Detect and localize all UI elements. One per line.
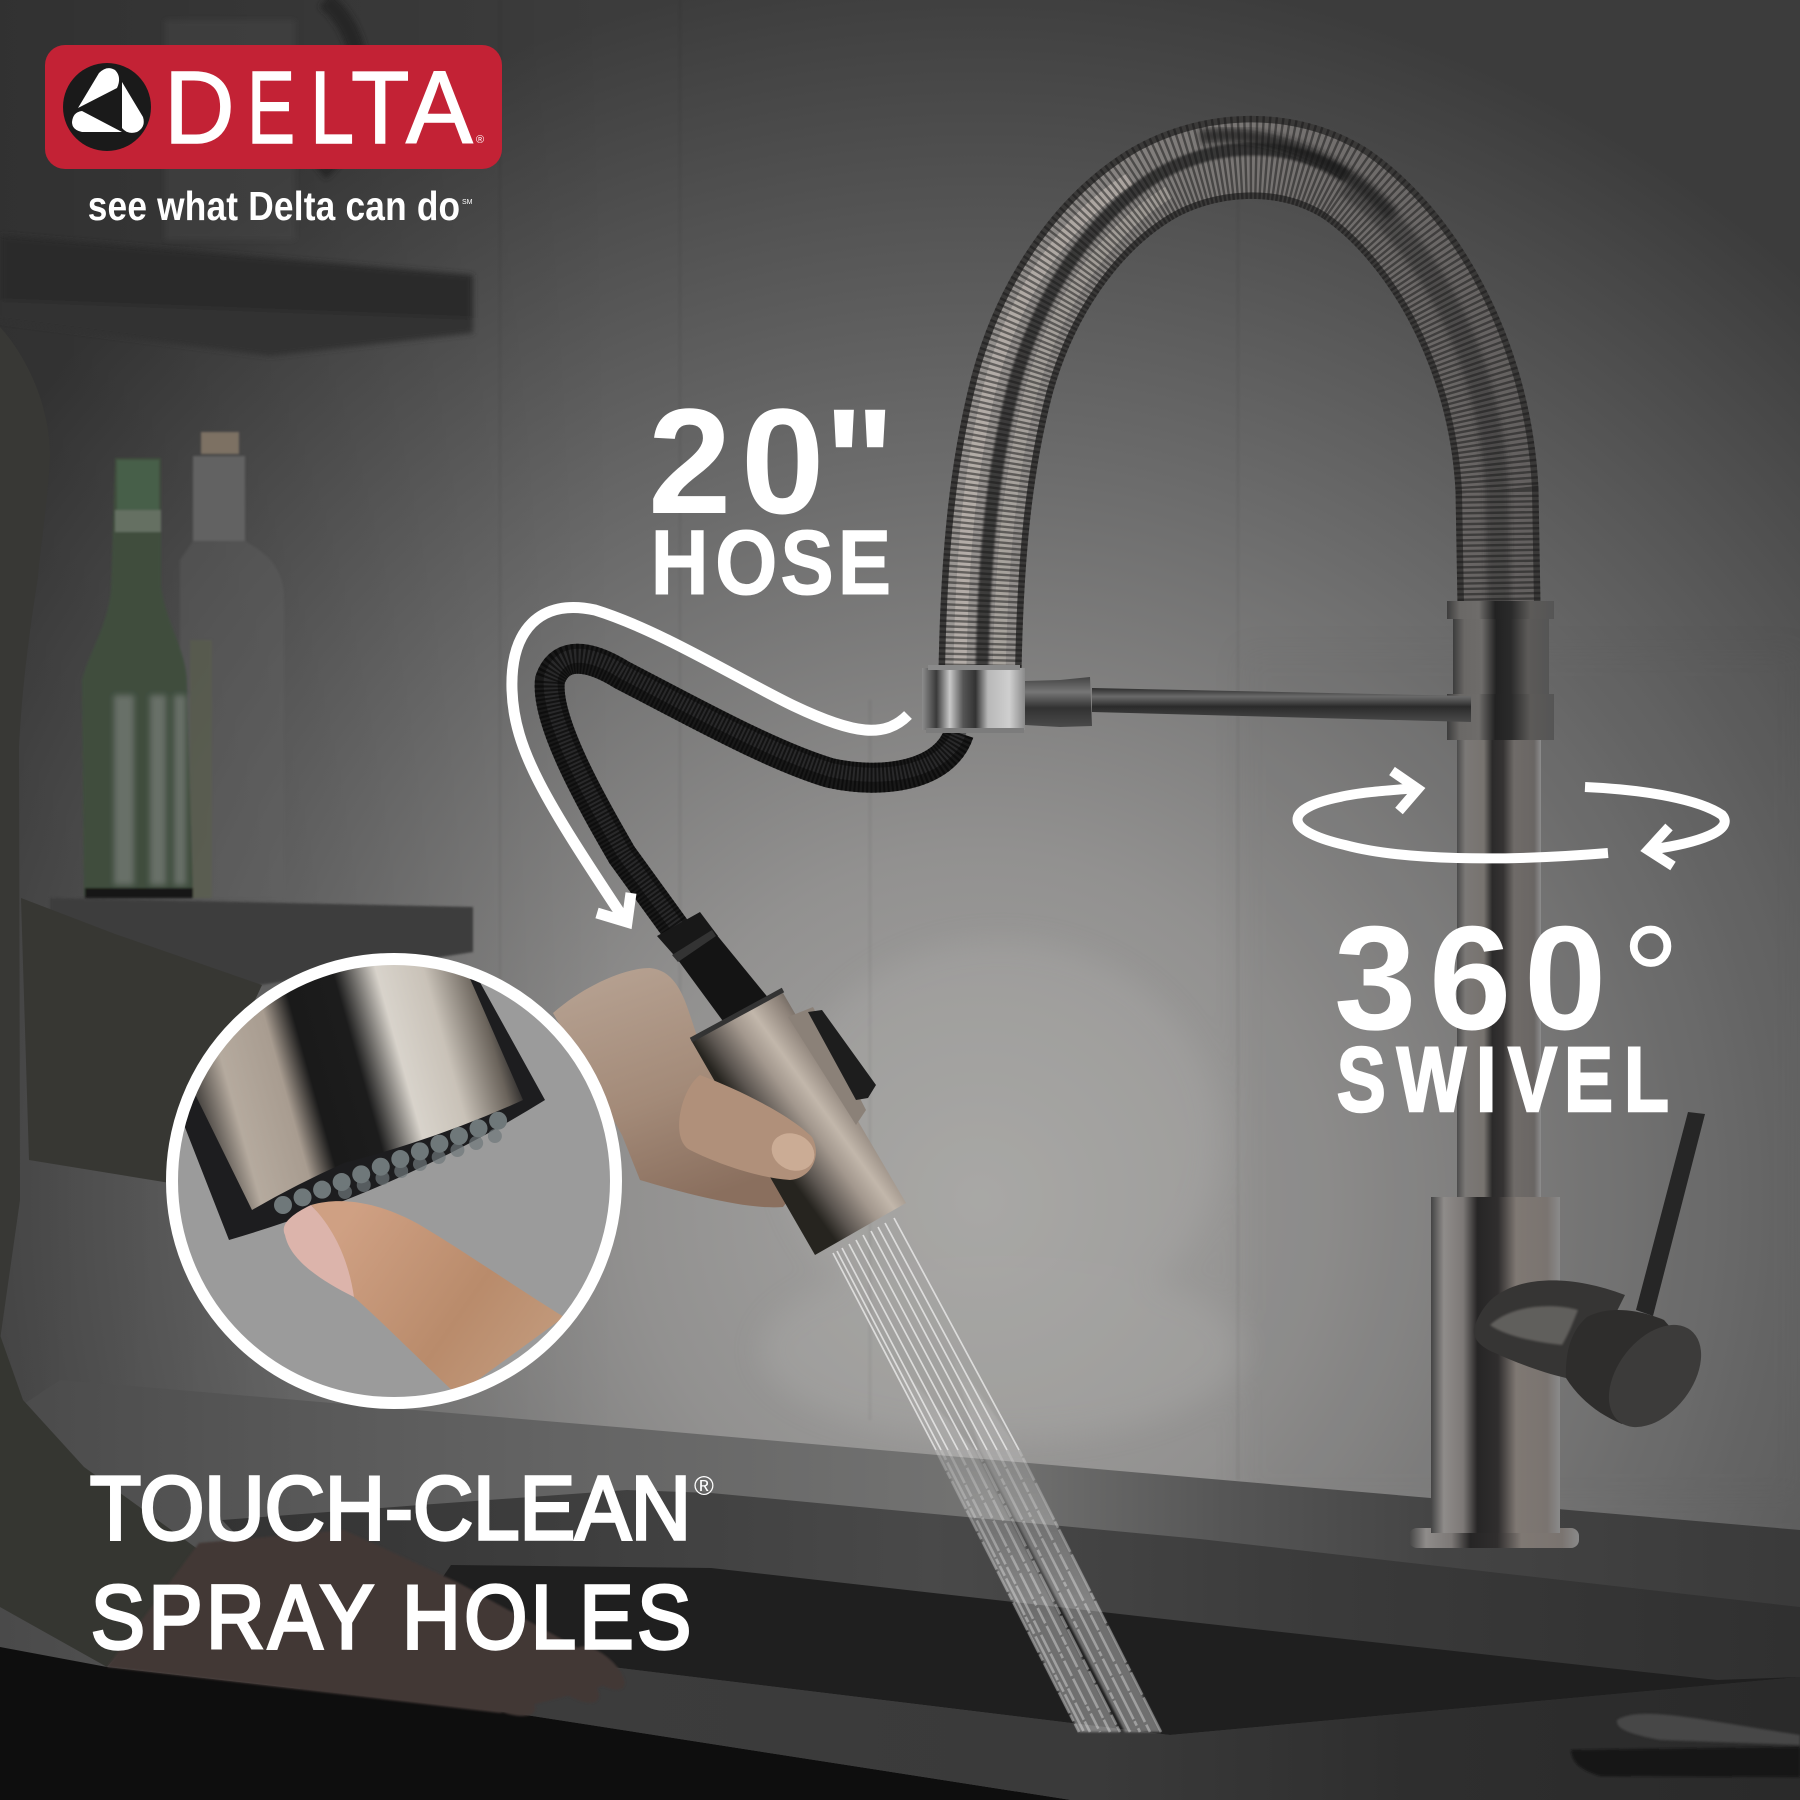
- lens background: [172, 959, 616, 1403]
- arrowhead: [597, 893, 631, 922]
- valve highlight: [1490, 1306, 1578, 1345]
- left swivel arrow: [1298, 788, 1608, 858]
- counter back surface: [0, 1380, 1800, 1800]
- rubber spray nozzles: [283, 1118, 505, 1205]
- spray head closeup metal: [196, 965, 523, 1210]
- items on counter right: [1571, 1714, 1800, 1777]
- right swivel arrow: [1585, 787, 1725, 850]
- brand name: E: [247, 50, 295, 165]
- bottle base: [85, 888, 193, 898]
- registered mark: ®: [694, 1471, 714, 1501]
- bottle neck band: [115, 510, 161, 532]
- registered mark: ®: [476, 134, 484, 146]
- sleeve of resting arm: [0, 1335, 199, 1667]
- spray holes label: SPRAY HOLES: [91, 1567, 691, 1668]
- feature: 360 degree swivel: [1334, 896, 1680, 1131]
- lower broken streams: [936, 1450, 1161, 1732]
- spray head closeup rim: [184, 978, 545, 1240]
- arm connector: [1025, 677, 1092, 727]
- brand name: D: [164, 51, 235, 166]
- corrugated spring arch: [960, 135, 1499, 679]
- column collar: [1447, 601, 1554, 740]
- service mark: SM: [462, 199, 473, 206]
- dark tool on counter: [1571, 1747, 1800, 1777]
- lens ring: [172, 959, 616, 1403]
- red badge: [45, 45, 502, 169]
- faucet base flange: [1409, 1528, 1579, 1548]
- tagline: see what Delta can do: [88, 184, 460, 230]
- faint tile joints: [500, 0, 1238, 1480]
- feature: 20 inch hose: 20": [648, 377, 895, 545]
- brand name: T: [351, 51, 410, 166]
- upper shelf: [0, 235, 473, 356]
- swivel label: SWIVEL: [1337, 1028, 1669, 1131]
- water spray: [833, 1218, 1161, 1732]
- spray head body: [691, 993, 906, 1255]
- bottles on shelf: [82, 432, 284, 898]
- spoon on counter: [1617, 1714, 1800, 1745]
- fingertip: [311, 1201, 564, 1395]
- brand name: [164, 50, 473, 166]
- speckled counter edge: [222, 1490, 1800, 1800]
- green bottle: [82, 458, 193, 896]
- blurred items behind logo: [165, 0, 360, 240]
- hose length arrow: [512, 608, 908, 922]
- mixing valve body: [1474, 1280, 1625, 1378]
- left arrowhead: [1392, 771, 1418, 811]
- pale bottle: [180, 432, 284, 898]
- sink basin: [400, 1565, 1800, 1735]
- bottle neck tint: [117, 460, 159, 510]
- hose label: HOSE: [651, 512, 891, 614]
- valve cap: [1566, 1308, 1720, 1444]
- sleeve of reaching arm: [21, 898, 262, 1183]
- horizontal spout arm: [1092, 688, 1471, 722]
- front counter face: [0, 1647, 1071, 1800]
- upper solid streams: [833, 1218, 1019, 1450]
- right arrowhead: [1648, 827, 1673, 866]
- emblem disc: [63, 63, 151, 151]
- resting hand: [107, 1530, 631, 1725]
- feature: touch-clean spray holes: [90, 1459, 714, 1668]
- bottle highlights: [114, 695, 186, 885]
- left side wall shading: [0, 0, 620, 1800]
- lower shelf: [50, 898, 473, 985]
- lever handle: [1636, 1112, 1705, 1316]
- emblem petals: [72, 68, 144, 133]
- thumb on sprayer: [679, 1075, 821, 1180]
- fingernail: [284, 1205, 354, 1297]
- wrist and hand holding sprayer: [553, 968, 800, 1207]
- blurred marble tile wall detail: [760, 650, 1800, 1500]
- faucet column: [1457, 735, 1541, 1197]
- person torso strip: [0, 327, 50, 1340]
- feature: 360 degree swivel: °: [1621, 896, 1680, 1061]
- spray toggle button: [788, 1007, 876, 1125]
- braided black pull-down hose: [550, 656, 960, 935]
- feature: touch-clean spray holes: TOUCH-CLEAN: [90, 1459, 691, 1559]
- swivel arrows: [1298, 771, 1725, 866]
- feature: 360 degree swivel: 360: [1334, 896, 1606, 1061]
- front counter surface: [513, 1668, 1800, 1800]
- chrome hose clamp: [922, 665, 1025, 733]
- misted spray bands: [885, 1350, 1161, 1732]
- faucet base cylinder: [1431, 1197, 1560, 1533]
- logo: [45, 45, 502, 169]
- brand name: L: [310, 51, 354, 165]
- brand name: A: [406, 50, 473, 165]
- spray head neck: [657, 912, 770, 1028]
- callout lens: touch-clean spray holes: [166, 953, 622, 1409]
- spray head rim: [691, 990, 783, 1040]
